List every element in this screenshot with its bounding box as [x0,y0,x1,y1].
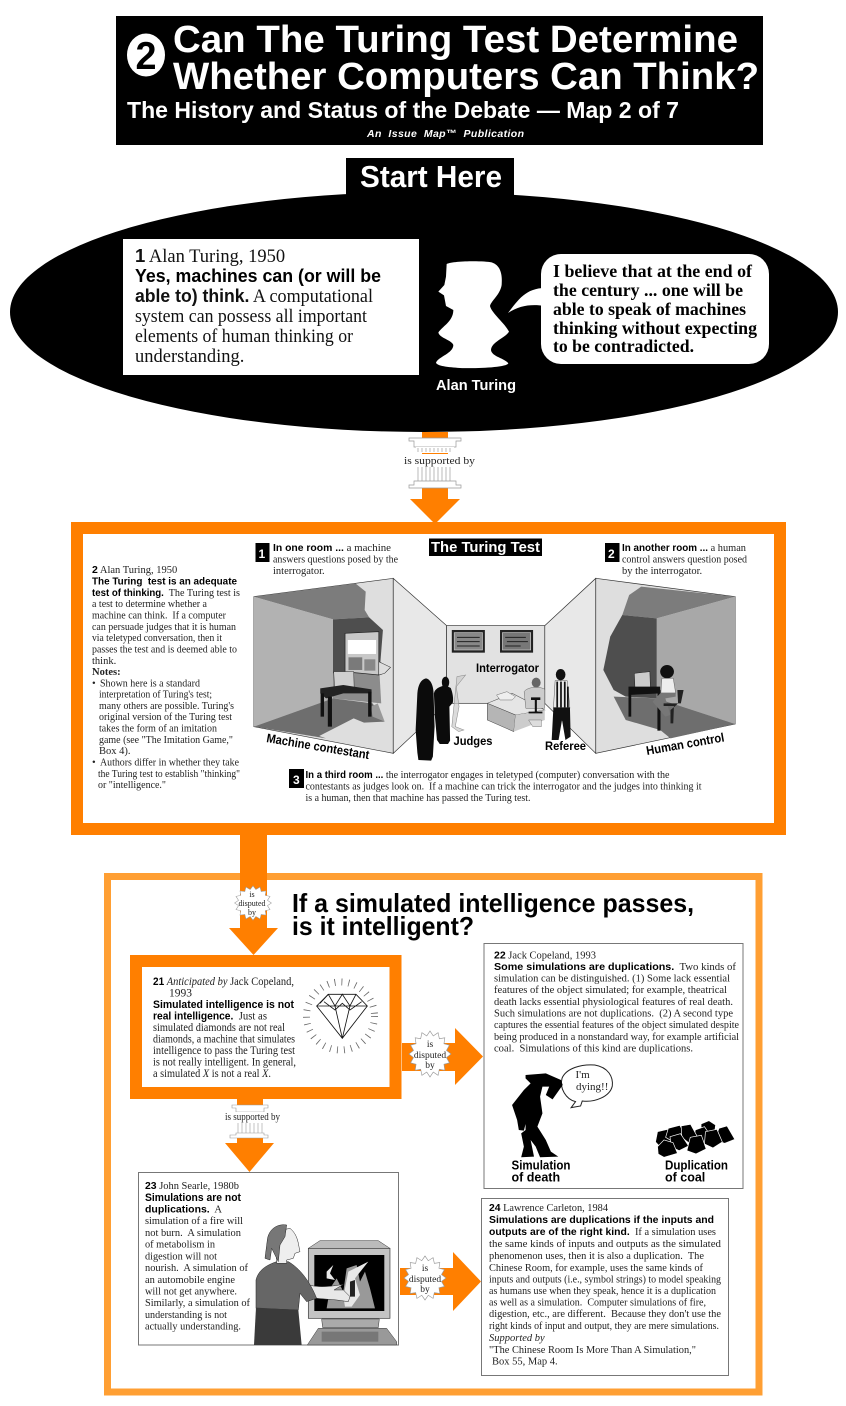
label: Interrogator: Interrogator [476,661,539,675]
text: step 3: 3 [293,773,300,787]
box 21: 1993 [169,988,192,1000]
text: step 1: answers questions posed by the [273,554,398,566]
caption: simulation of death: Simulation [512,1158,570,1172]
box 23: Similarly, a simulation of [145,1298,250,1309]
box 24: 24 Lawrence Carleton, 1984 [489,1202,609,1214]
text: claim 2: machine can think. If a computer [92,610,226,622]
box 23: duplications. A [145,1204,222,1216]
box 24: Box 55, Map 4. [492,1356,558,1368]
text: claim 2: original version of the Turing test [99,712,232,723]
text: claim 2: passes the test and is deemed able to [92,644,237,656]
arrow: is disputed by (right, top): by [425,1061,435,1071]
text: claim 2: takes the form of an imitation [99,724,218,734]
illustration: person and monitor with fire [254,1225,397,1345]
bubble text: I'm [576,1069,590,1081]
arrow: is supported by (down): is supported by [225,1112,280,1123]
arrow: is disputed by (right, bottom): disputed [409,1275,441,1285]
start here ellipse panel [10,158,838,432]
text: claim 2: think. [92,656,116,667]
text: step 2: control answers question posed [622,554,748,566]
speech bubble: I believe that at the end of [553,261,752,281]
text: claim 2: via teletyped conversation, then it [92,633,222,644]
title banner: Whether Computers Can Think? [173,56,759,98]
text: claim 2: game (see "The Imitation Game," [99,735,233,746]
box 23 [138,1172,398,1345]
caption: duplication of coal [665,1158,728,1184]
box 23: Simulations are not [145,1192,241,1204]
text: claim 2: • [92,678,96,690]
arrow: is supported by [402,432,478,524]
box 22: being produced in a nonstandard way, for example artificial [494,1032,739,1043]
box 22: 22 Jack Copeland, 1993 [494,950,596,962]
box 24: the same kinds of inputs and outputs as the simulated [489,1239,722,1250]
start here label: Start Here [360,159,502,194]
caption: duplication of coal: Duplication [665,1158,728,1172]
text: claim 2 [92,564,240,791]
text: step 1 [256,543,398,577]
claim 1 text box: 1 Alan Turing, 1950 [135,245,285,267]
arrow: is disputed by (down): by [248,908,256,917]
box 23: 23 John Searle, 1980b [145,1180,239,1192]
title banner: 2 [136,35,156,78]
box 23: understanding is not [145,1310,227,1321]
text: step 3 [289,769,702,804]
side wall left [393,578,447,753]
arrow: is supported by: is supported by [404,455,476,467]
text: step 1: interrogator. [273,566,325,577]
text: step 1: 1 [258,547,266,561]
arrow: is disputed by (down): is [249,890,255,899]
arrow: is disputed by (down): disputed [238,899,266,908]
arrow: is disputed by (right, bottom) [400,1252,481,1311]
box 23: simulation of a fire will [145,1216,243,1227]
box 24: "The Chinese Room Is More Than A Simulation," [489,1345,696,1356]
text: step 3: contestants as judges look on. If a machine can trick the interrogator and the judges into thinking it [306,782,702,792]
heading: If a simulated intelligence passes, [292,888,694,918]
panel: simulated intelligence [108,835,759,1392]
caption: duplication of coal: of coal [665,1170,705,1184]
text: claim 2: The Turing test is an adequate [92,576,237,588]
box 23: will not get anywhere. [145,1286,237,1298]
label: Judges: Judges [454,734,493,748]
text: step 1: In one room ... a machine [273,543,391,554]
text: claim 2: Shown here is a standard [100,678,201,690]
box 21 [136,961,396,1093]
bubble text second line: dying!! [576,1081,608,1093]
box 21: a simulated X is not a real X. [153,1068,271,1080]
box 22 [484,944,743,1188]
box 22: coal. Simulations of this kind are duplications. [494,1044,693,1054]
heading: The Turing Test: The Turing Test [431,539,540,556]
arrow: is supported by (down) [225,1099,281,1172]
box 21: Simulated intelligence is not [153,999,294,1011]
side wall right [545,578,596,753]
text: claim 2: test of thinking. The Turing test is [92,588,240,599]
icon: Alan Turing silhouette [436,261,509,368]
box 22: captures the essential features of the object simulated despite [494,1020,739,1031]
text: claim 2: Box 4). [99,746,130,757]
box 24: digestion, etc., are different. Because they don't use the [489,1309,721,1320]
text: claim 2: can persuade judges that it is human [92,622,237,633]
box 22: Some simulations are duplications. Two kinds of [494,961,737,973]
text: claim 2: Authors differ in whether they take [100,758,239,768]
box 21: 21 Anticipated by Jack Copeland, [153,976,294,988]
text: claim 2: 2 Alan Turing, 1950 [92,564,177,576]
text: step 3: is a human, then that machine has passed the Turing test. [306,793,530,804]
back wall [447,626,545,703]
text: claim 2: Notes: [92,667,121,678]
box 23: not burn. A simulation [145,1228,242,1239]
caption: simulation of death [512,1158,570,1184]
claim 1 text box: able to) think. A computational [135,286,373,307]
title banner [116,16,763,145]
Alan Turing caption: Alan Turing [436,378,516,394]
box 22: Such simulations are not duplications. (2) A second type [494,1008,733,1020]
text: claim 2: many others are possible. Turing's [99,701,234,712]
text: claim 2: • [92,758,96,768]
arrow: is disputed by (right, bottom): by [420,1285,430,1295]
box 22: death lacks essential physiological features of real death. [494,997,733,1008]
box 24: Supported by [489,1333,545,1344]
judges [416,675,466,761]
text: claim 2: interpretation of Turing's test; [99,690,212,700]
text: step 3: In a third room ... the interrogator engages in teletyped (computer) conversation with the [306,770,670,781]
panel: the Turing test [77,528,780,829]
text: step 2 [605,543,748,577]
box 21: diamonds, a machine that simulates [153,1034,295,1046]
box 24 [482,1198,728,1376]
box 24: phenomenon uses, then it is also a duplication. The [489,1251,704,1262]
interrogator desk [487,678,545,732]
speech bubble: thinking without expecting [553,318,757,338]
text: claim 2: or "intelligence." [98,780,166,791]
box 24: Simulations are duplications if the inputs and [489,1214,714,1226]
label: Machine contestant: Machine contestant [266,731,371,762]
title banner: The History and Status of the Debate — Map 2 of 7 [127,97,679,123]
claim 1 text box: elements of human thinking or [135,327,353,347]
text: step 2: by the interrogator. [622,566,702,577]
box 23: of metabolism in [145,1240,216,1250]
arrow: is disputed by (right, top): is [427,1040,433,1050]
icon: coal [656,1121,735,1157]
box 21: real intelligence. Just as [153,1010,267,1022]
box 23: actually understanding. [145,1322,241,1332]
text: step 2: In another room ... a human [622,543,747,554]
box 24: as well as a simulation. Computer simulations of fire, [489,1298,706,1308]
box 23: digestion will not [145,1252,217,1262]
box 23: an automobile engine [145,1275,235,1286]
speech bubble: able to speak of machines [553,299,746,319]
label: Human control: Human control [645,730,725,758]
speech bubble [508,254,769,364]
box 24: as humans use when they speak, hence it is a duplication [489,1286,717,1297]
arrow: is disputed by (right, top) [402,1028,483,1085]
text: claim 2: the Turing test to establish "thinking" [98,769,240,780]
arrow: is disputed by (down) [229,835,278,955]
box 21: is not really intelligent. In general, [153,1056,296,1068]
icon: diamond [306,982,374,1050]
left room: machine contestant [254,578,393,753]
icon: dying figure with speech bubble [512,1065,612,1157]
referee [552,669,571,740]
box 21: intelligence to pass the Turing test [153,1045,296,1057]
caption: simulation of death: of death [512,1170,560,1184]
heading: is it intelligent? [292,911,474,941]
box 24: right kinds of input and output, they are mere simulations. [489,1321,719,1332]
box 22: simulation can be distinguished. (1) Some lack essential [494,974,730,984]
title banner: An Issue Map™ Publication [366,128,524,140]
speech bubble: the century ... one will be [553,280,743,300]
box 22: features of the object simulated; for example, theatrical [494,985,727,996]
arrow: is disputed by (right, bottom): is [422,1264,428,1274]
speech bubble: to be contradicted. [553,336,694,356]
claim 1 text box: system can possess all important [135,307,368,327]
box 23: nourish. A simulation of [145,1263,248,1274]
label: Referee: Referee [545,739,586,753]
text: claim 2: a test to determine whether a [92,599,207,610]
box 21: simulated diamonds are not real [153,1022,285,1034]
text: step 2: 2 [608,547,615,561]
claim 1 text box: understanding. [135,347,244,367]
box 24: Chinese Room, for example, uses the same kinds of [489,1263,703,1274]
illustration: three rooms [254,578,735,761]
heading [292,888,694,941]
right room: human control [596,578,735,753]
title banner: Can The Turing Test Determine [173,19,738,61]
claim 1 text box: Yes, machines can (or will be [135,266,381,286]
box 24: outputs are of the right kind. If a simulation uses [489,1226,716,1238]
arrow: is disputed by (right, top): disputed [414,1051,446,1061]
box 24: inputs and outputs (i.e., symbol strings) to model speaking [489,1274,722,1286]
claim 1 text box [123,239,419,375]
